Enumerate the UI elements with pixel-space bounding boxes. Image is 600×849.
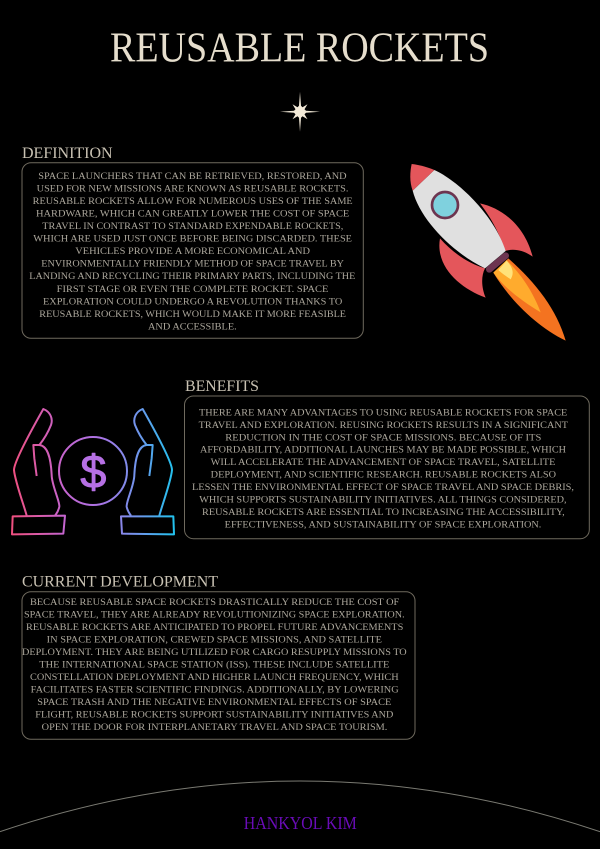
definition text: SPACE LAUNCHERS THAT CAN BE RETRIEVED, RESTORED, AND	[38, 172, 347, 182]
definition text: USED FOR NEW MISSIONS ARE KNOWN AS REUSABLE ROCKETS.	[37, 184, 348, 194]
heading: definition: DEFINITION	[22, 145, 113, 162]
current development text: SPACE TRAVEL, THEY ARE ALREADY REVOLUTIONIZING SPACE EXPLORATION.	[24, 610, 405, 620]
benefits text: REUSABLE ROCKETS ARE ESSENTIAL TO INCREASING THE ACCESSIBILITY,	[202, 508, 565, 518]
left cuff	[12, 516, 65, 534]
panel: benefits	[184, 396, 589, 539]
benefits text: LESSEN THE ENVIRONMENTAL EFFECT OF SPACE TRAVEL AND SPACE DEBRIS,	[192, 483, 574, 493]
left hand	[14, 409, 59, 516]
current development text: DEPLOYMENT. THEY ARE BEING UTILIZED FOR CARGO RESUPPLY MISSIONS TO	[22, 648, 407, 658]
coin	[59, 437, 127, 505]
current development text: BECAUSE REUSABLE SPACE ROCKETS DRASTICALLY REDUCE THE COST OF	[30, 598, 399, 608]
definition text: EXPLORATION COULD UNDERGO A REVOLUTION THANKS TO	[43, 297, 343, 307]
definition text: FIRST STAGE OR EVEN THE COMPLETE ROCKET. SPACE	[57, 285, 329, 295]
definition box	[22, 163, 363, 338]
rocket right fin	[480, 203, 533, 257]
benefits text: REDUCTION IN THE COST OF SPACE MISSIONS. BECAUSE OF ITS	[225, 433, 541, 443]
panel: definition	[22, 163, 363, 338]
definition text: TRAVEL IN CONTRAST TO STANDARD EXPENDABLE ROCKETS,	[42, 222, 343, 232]
current development text: FLIGHT, REUSABLE ROCKETS SUPPORT SUSTAINABILITY INITIATIVES AND	[35, 710, 394, 720]
definition text: REUSABLE ROCKETS ALLOW FOR NUMEROUS USES OF THE SAME	[33, 197, 353, 207]
right hand	[127, 409, 172, 516]
benefits text	[192, 408, 574, 531]
heading: current development: CURRENT DEVELOPMENT	[22, 574, 218, 591]
current development text: SPACE TRASH AND THE NEGATIVE ENVIRONMENTAL EFFECTS OF SPACE	[37, 698, 392, 708]
benefits text: AFFORDABILITY, ADDITIONAL LAUNCHES MAY BE MADE POSSIBLE, WHICH	[200, 446, 566, 456]
definition text	[29, 172, 356, 332]
current development text: CONSTELLATION DEPLOYMENT AND HIGHER LAUNCH FREQUENCY, WHICH	[30, 673, 399, 683]
definition text: ENVIRONMENTALLY FRIENDLY METHOD OF SPACE TRAVEL BY	[41, 260, 344, 270]
icon: sparkle star	[280, 92, 320, 132]
benefits text: TRAVEL AND EXPLORATION. REUSING ROCKETS RESULTS IN A SIGNIFICANT	[199, 421, 568, 431]
author name: HANKYOL KIM	[244, 813, 357, 833]
benefits text: EFFECTIVENESS, AND SUSTAINABILITY OF SPACE EXPLORATION.	[225, 521, 541, 531]
benefits text: WHICH SUPPORTS SUSTAINABILITY INITIATIVES. ALL THINGS CONSIDERED,	[199, 496, 567, 506]
rocket window	[432, 192, 458, 218]
current development text	[22, 598, 407, 733]
definition text: HARDWARE, WHICH CAN GREATLY LOWER THE COST OF SPACE	[36, 210, 350, 220]
rocket left fin	[439, 238, 486, 298]
heading: benefits: BENEFITS	[185, 378, 259, 395]
rocket nozzle	[489, 256, 506, 269]
icon: hands holding coin	[12, 409, 174, 534]
definition text: REUSABLE ROCKETS, WHICH WOULD MAKE IT MORE FEASIBLE	[39, 310, 346, 320]
benefits box	[184, 396, 589, 539]
definition text: WHICH ARE USED JUST ONCE BEFORE BEING DISCARDED. THESE	[33, 235, 352, 245]
dollar sign: $	[80, 445, 106, 497]
benefits text: DEPLOYMENT, AND SCIENTIFIC RESEARCH. REUSABLE ROCKETS ALSO	[211, 471, 556, 481]
panel: current development	[22, 592, 415, 739]
rocket nose	[410, 164, 434, 191]
current development text: IN SPACE EXPLORATION, CREWED SPACE MISSIONS, AND SATELLITE	[47, 636, 382, 646]
title: REUSABLE ROCKETS	[110, 26, 489, 72]
current development text: THE INTERNATIONAL SPACE STATION (ISS). THESE INCLUDE SATELLITE	[39, 660, 390, 670]
icon: rocket	[410, 164, 566, 341]
benefits text: THERE ARE MANY ADVANTAGES TO USING REUSABLE ROCKETS FOR SPACE	[199, 408, 568, 418]
right cuff	[121, 516, 174, 534]
rocket flame	[493, 258, 566, 341]
current development text: REUSABLE ROCKETS ARE ANTICIPATED TO PROPEL FUTURE ADVANCEMENTS	[26, 623, 403, 633]
benefits text: WILL ACCELERATE THE ADVANCEMENT OF SPACE TRAVEL, SATELLITE	[211, 458, 556, 468]
definition text: VEHICLES PROVIDE A MORE ECONOMICAL AND	[75, 247, 310, 257]
rocket body	[413, 170, 506, 268]
current development box	[22, 592, 415, 739]
definition text: LANDING AND RECYCLING THEIR PRIMARY PARTS, INCLUDING THE	[29, 272, 356, 282]
definition text: AND ACCESSIBLE.	[148, 322, 237, 332]
current development text: OPEN THE DOOR FOR INTERPLANETARY TRAVEL AND SPACE TOURISM.	[42, 723, 387, 733]
current development text: FACILITATES FASTER SCIENTIFIC FINDINGS. ADDITIONALLY, BY LOWERING	[31, 686, 399, 696]
